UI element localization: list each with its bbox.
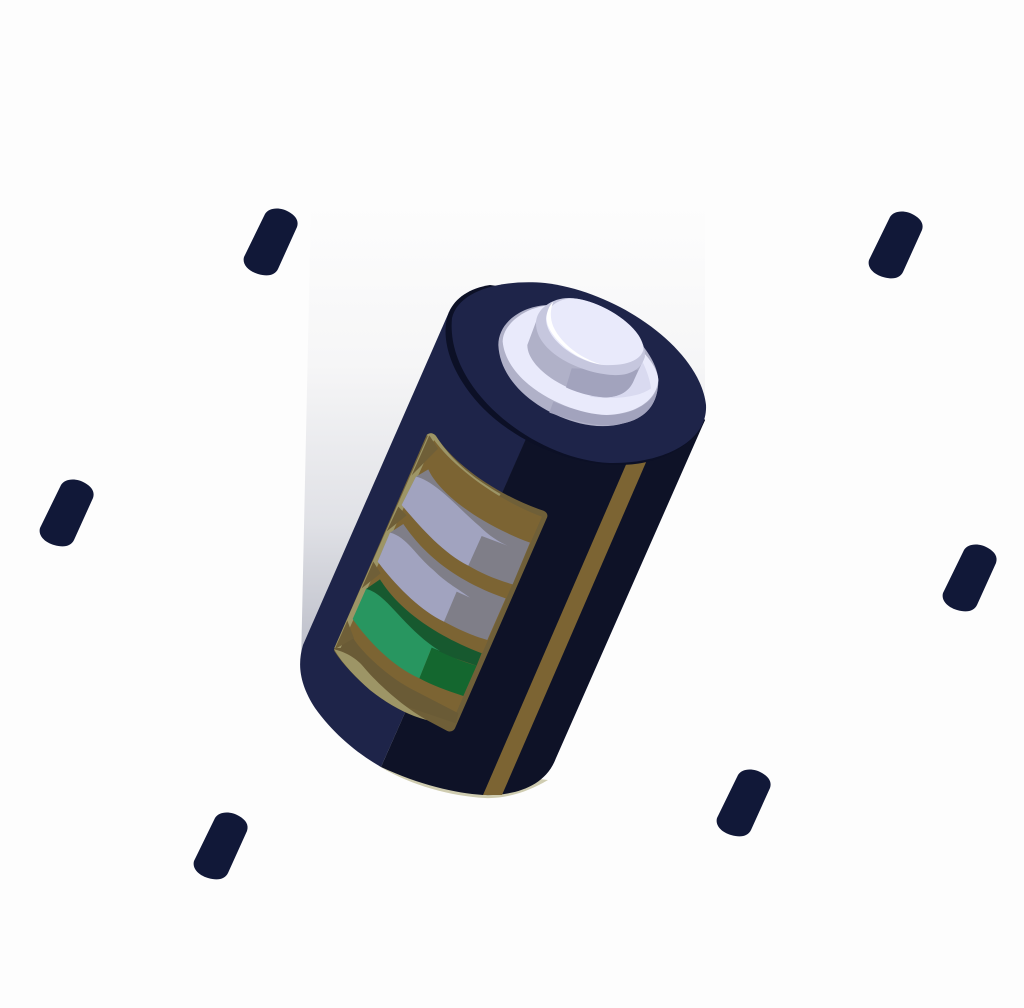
- battery body light side: [300, 312, 560, 767]
- neck right: [566, 368, 638, 397]
- label outer dark: [334, 433, 547, 732]
- label top rim light: [427, 433, 501, 497]
- battery body dark side: [381, 400, 705, 795]
- label gold inner: [340, 440, 542, 713]
- small cylinder 6: [194, 812, 248, 879]
- cell 3 green: [353, 579, 482, 696]
- flange face: [503, 306, 658, 415]
- top rim shadow: [446, 285, 705, 465]
- cell 2 light: [378, 533, 470, 622]
- cell 1 dark: [402, 469, 530, 584]
- gold stripe: [483, 460, 647, 795]
- battery label: [334, 433, 547, 732]
- small cylinder 4: [943, 544, 997, 611]
- light beam shadow: [301, 205, 705, 758]
- terminal top side: [536, 298, 645, 375]
- flange side right: [549, 387, 658, 425]
- gold corner shade 4: [335, 621, 354, 649]
- cell 1 light: [402, 477, 513, 566]
- small cylinder 1: [244, 208, 298, 275]
- gold corner shade 1: [412, 435, 438, 475]
- flange shaded area: [590, 360, 651, 398]
- small cylinder 3: [40, 479, 94, 546]
- cell 2 dark: [378, 524, 506, 640]
- cell 2: [378, 524, 506, 640]
- small cylinder 2: [869, 211, 923, 278]
- neck left: [527, 320, 645, 397]
- battery: [300, 282, 706, 798]
- label left strip: [334, 434, 435, 648]
- cell 3 dark front: [419, 648, 477, 696]
- flange side left: [498, 303, 658, 426]
- terminal highlight: [547, 302, 603, 365]
- gold corner shade 2: [387, 507, 407, 531]
- label bottom khaki: [334, 649, 427, 720]
- terminal top face: [546, 298, 643, 365]
- label bottom shade: [335, 638, 458, 723]
- cell 3 light: [353, 589, 440, 678]
- small cylinder 5: [717, 769, 771, 836]
- battery terminal: [498, 298, 658, 426]
- gold corner shade 3: [362, 562, 381, 588]
- base edge highlight: [379, 765, 548, 798]
- cell 3 dark top: [366, 579, 482, 666]
- cell 1: [402, 469, 530, 584]
- top disc: [452, 282, 706, 463]
